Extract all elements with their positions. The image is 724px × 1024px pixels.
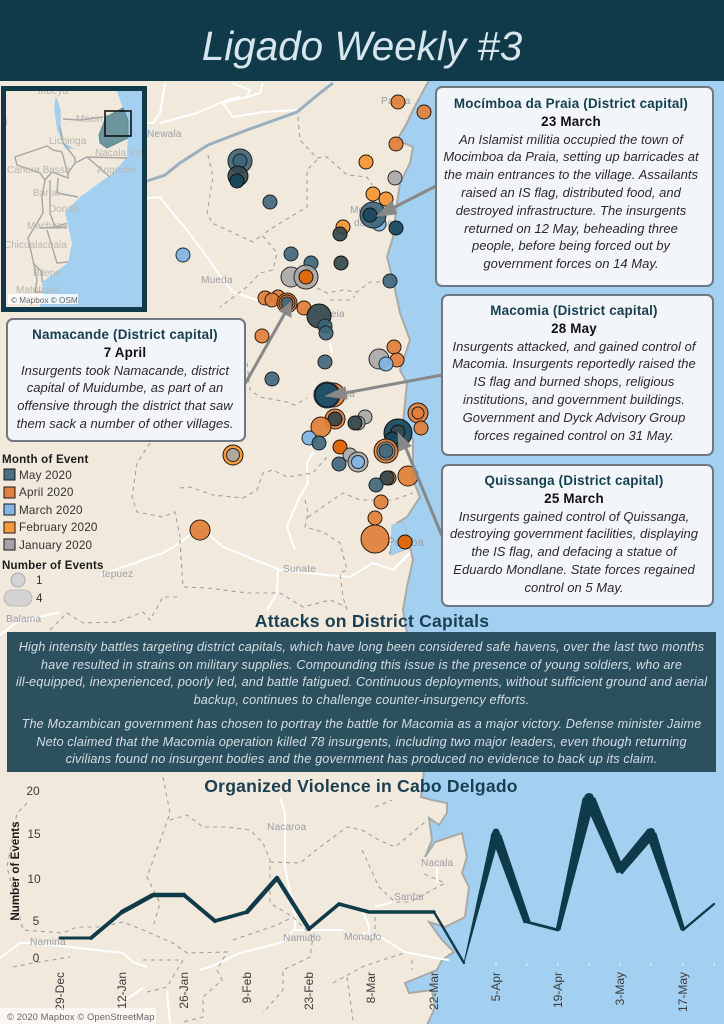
inset labels: Chicualacuala	[4, 240, 67, 251]
callout: Namacande: offensive through the district that saw	[17, 398, 233, 413]
roads	[0, 83, 449, 1023]
paragraph: Macomia claims: Neto claimed that the Macomia operation killed 78 insurgents, including two major leaders, even though returning	[36, 735, 687, 749]
x axis dates: 26-Jan	[177, 972, 191, 1009]
x axis dates: 23-Feb	[302, 972, 316, 1010]
paragraph: military strain: have resulted in strains on military supplies. Compounding this issue is the presence of young soldiers, who are	[41, 658, 682, 672]
legend: month of event: May 2020	[19, 469, 72, 482]
paragraph: Macomia claims: The Mozambican government has chosen to portray the battle for Macomia as a major victory. Defense minister Jaime	[22, 717, 701, 731]
place labels: Monapo	[344, 932, 382, 943]
callout: Namacande: capital of Muidumbe, as part of an	[27, 380, 223, 395]
place labels: Palma	[381, 96, 411, 107]
data line	[60, 793, 714, 963]
callout: Mocimboa da Praia: returned on 12 May, beheading three	[464, 221, 678, 236]
legend: month of event: April 2020	[19, 486, 74, 499]
callout: Macomia: Macomia (District capital)	[490, 303, 658, 318]
inset land	[1, 86, 128, 312]
callout: Macomia: IS flag and burned shops, religious	[474, 374, 674, 389]
event bubbles north	[176, 95, 431, 343]
callout: Mocimboa da Praia: government forces on 14 May.	[483, 256, 659, 271]
inset labels: Bilene	[33, 268, 61, 279]
x axis dates: 17-May	[676, 972, 690, 1012]
place labels: Mueda	[201, 275, 233, 286]
x axis dates: 8-Mar	[364, 972, 378, 1003]
province boundaries	[7, 117, 445, 1022]
legend: month of event	[2, 453, 98, 552]
y axis: Number of Events	[9, 821, 22, 921]
inset Cabo Delgado highlight	[99, 108, 128, 148]
river	[147, 83, 333, 181]
paragraph: military strain: High intensity battles targeting district capitals, which have long been considered safe havens, over the last two months	[19, 640, 704, 654]
inset locator map: © Mapbox © OSM	[11, 296, 78, 305]
inset labels: Mocimboa	[76, 114, 123, 125]
legend: number of events	[2, 560, 104, 606]
legend: number of events: 4	[36, 592, 43, 605]
y axis: 5	[33, 914, 40, 928]
callout: Namacande	[6, 318, 246, 442]
inset labels: hi	[0, 117, 8, 128]
paragraph: military strain: backup, continues to challenge counter-insurgency efforts.	[194, 693, 529, 707]
place labels: Sanfar	[394, 892, 425, 903]
callout: Macomia	[441, 294, 714, 456]
x axis dates: 5-Apr	[489, 972, 503, 1001]
x axis dates	[53, 972, 690, 1012]
callout: Quissanga: destroying government facilities, displaying	[450, 526, 698, 541]
callout: Quissanga: control on 5 May.	[524, 580, 624, 595]
inset labels: Barue	[33, 188, 60, 199]
callout: Macomia: forces regained control on 31 May.	[474, 428, 674, 443]
ticks	[496, 963, 714, 966]
place labels: tepuez	[102, 569, 133, 580]
callout: Macomia: 28 May	[551, 321, 597, 336]
inset focus box	[105, 111, 131, 136]
paragraph: military strain	[16, 640, 708, 707]
callout: Mocimboa da Praia: the main entrances to the village. Assailants	[444, 167, 698, 182]
place labels: Nacaroa	[267, 822, 306, 833]
arrow: Quissanga callout	[398, 433, 442, 536]
x axis dates: 19-Apr	[551, 972, 565, 1008]
event bubbles south	[190, 340, 428, 553]
callout: Mocimboa da Praia: raised an IS flag, distributed food, and	[461, 185, 681, 200]
inset labels: Matutuine	[16, 285, 60, 296]
place labels: Namialo	[283, 933, 321, 944]
inset attribution	[8, 294, 78, 304]
inset labels: Nacala Velha	[95, 148, 154, 159]
header bar	[0, 0, 724, 81]
x axis dates: 29-Dec	[53, 972, 67, 1011]
callout: Mocimboa da Praia: people, before being forced out by	[472, 238, 670, 253]
paragraph: Macomia claims: civilians found no insurgent bodies and the government has produced no evidence to back up its claim.	[66, 752, 657, 766]
arrow: Mocimboa callout	[377, 186, 436, 216]
callout: Macomia: Macomia. Insurgents reportedly raised the	[452, 356, 696, 371]
y axis: 15	[27, 827, 41, 841]
callout: Namacande: Namacande (District capital)	[32, 327, 218, 342]
inset labels: Lichinga	[49, 136, 87, 147]
text panel: attacks on district capitals	[7, 632, 716, 772]
inset labels: Mbeya	[38, 86, 68, 97]
legend: month of event: February 2020	[19, 521, 98, 534]
legend: month of event: March 2020	[19, 504, 83, 517]
y axis	[9, 784, 41, 965]
legend: month of event: January 2020	[19, 539, 93, 552]
place labels	[6, 96, 454, 948]
callout: Mocimboa da Praia: Mocímboa da Praia (District capital)	[454, 96, 688, 111]
callout: Mocimboa da Praia: Mocimboa da Praia, setting up barricades at	[443, 149, 699, 164]
y axis: 20	[26, 784, 40, 798]
place labels: Mocimboa	[350, 205, 398, 216]
place labels: Pemba	[387, 537, 424, 549]
x axis dates: 3-May	[613, 972, 627, 1005]
place labels: Newala	[147, 129, 182, 140]
x axis dates: 9-Feb	[240, 972, 254, 1003]
legend: month of event: Month of Event	[2, 453, 89, 466]
heading: attacks: Attacks on District Capitals	[255, 611, 489, 631]
callout: Quissanga: the IS flag, and defacing a statue of	[471, 544, 677, 559]
callout: Quissanga: Insurgents gained control of Quissanga,	[459, 509, 689, 524]
land	[0, 70, 469, 1024]
legend: number of events: 1	[36, 574, 43, 587]
place labels: Namina	[30, 937, 66, 948]
callout: Mocimboa da Praia: destroyed infrastructure. The insurgents	[456, 203, 686, 218]
y axis: 0	[33, 951, 40, 965]
place labels: Nacala	[421, 858, 454, 869]
callout: Quissanga	[441, 464, 714, 607]
arrow: Namacande callout	[245, 302, 291, 384]
place labels: da Praia	[354, 218, 393, 229]
inset frame	[4, 88, 144, 310]
inset labels: Cahora Bassa	[7, 165, 71, 176]
Pemba bay	[391, 522, 410, 555]
x axis dates: 12-Jan	[115, 972, 129, 1009]
paragraph: Macomia claims	[22, 717, 701, 766]
line chart: events over time	[9, 784, 714, 1012]
place labels: Macomia	[313, 389, 355, 400]
callout: Mocimboa da Praia: An Islamist militia occupied the town of	[459, 132, 683, 147]
place labels: Balama	[6, 614, 41, 625]
callout: Macomia: Government and Dyck Advisory Group	[463, 410, 685, 425]
place labels: Meleia	[314, 309, 345, 320]
callout: Namacande: Insurgents took Namacande, district	[21, 363, 229, 378]
y axis: 10	[27, 872, 41, 886]
callout: Namacande: 7 April	[104, 345, 146, 360]
map attribution	[0, 1008, 156, 1024]
title: Ligado Weekly #3	[202, 23, 522, 69]
arrow: Macomia callout	[326, 375, 442, 399]
callout: Quissanga: Eduardo Mondlane. State forces regained	[453, 562, 695, 577]
callout: Quissanga: Quissanga (District capital)	[484, 473, 663, 488]
inset labels: Dondo	[49, 204, 79, 215]
callout: Macomia: Insurgents attacked, and gained control of	[453, 339, 695, 354]
paragraph: military strain: ill-equipped, inexperienced, poorly led, and battle fatigued. Continuous deployments, without sufficient ground and aerial	[16, 675, 707, 689]
callout: Namacande: them sack a number of other villages.	[17, 416, 233, 431]
place labels: Sunate	[283, 564, 316, 575]
inset labels: Machaze	[27, 221, 68, 232]
map attribution: © 2020 Mapbox © OpenStreetMap	[7, 1011, 155, 1022]
legend: number of events: Number of Events	[2, 560, 104, 572]
inset lake	[55, 98, 72, 148]
heading: organized violence: Organized Violence in Cabo Delgado	[204, 776, 518, 796]
inset locator map	[0, 86, 154, 312]
callout: Macomia: institutions, and government buildings.	[463, 392, 685, 407]
callout: Mocimboa da Praia: 23 March	[541, 114, 601, 129]
callout: Mocimboa da Praia	[435, 86, 714, 287]
inset labels: Angoche	[97, 165, 137, 176]
callout: Quissanga: 25 March	[544, 491, 604, 506]
x axis dates: 22-Mar	[427, 972, 441, 1010]
inset labels	[0, 86, 154, 296]
inset borders	[15, 117, 127, 292]
